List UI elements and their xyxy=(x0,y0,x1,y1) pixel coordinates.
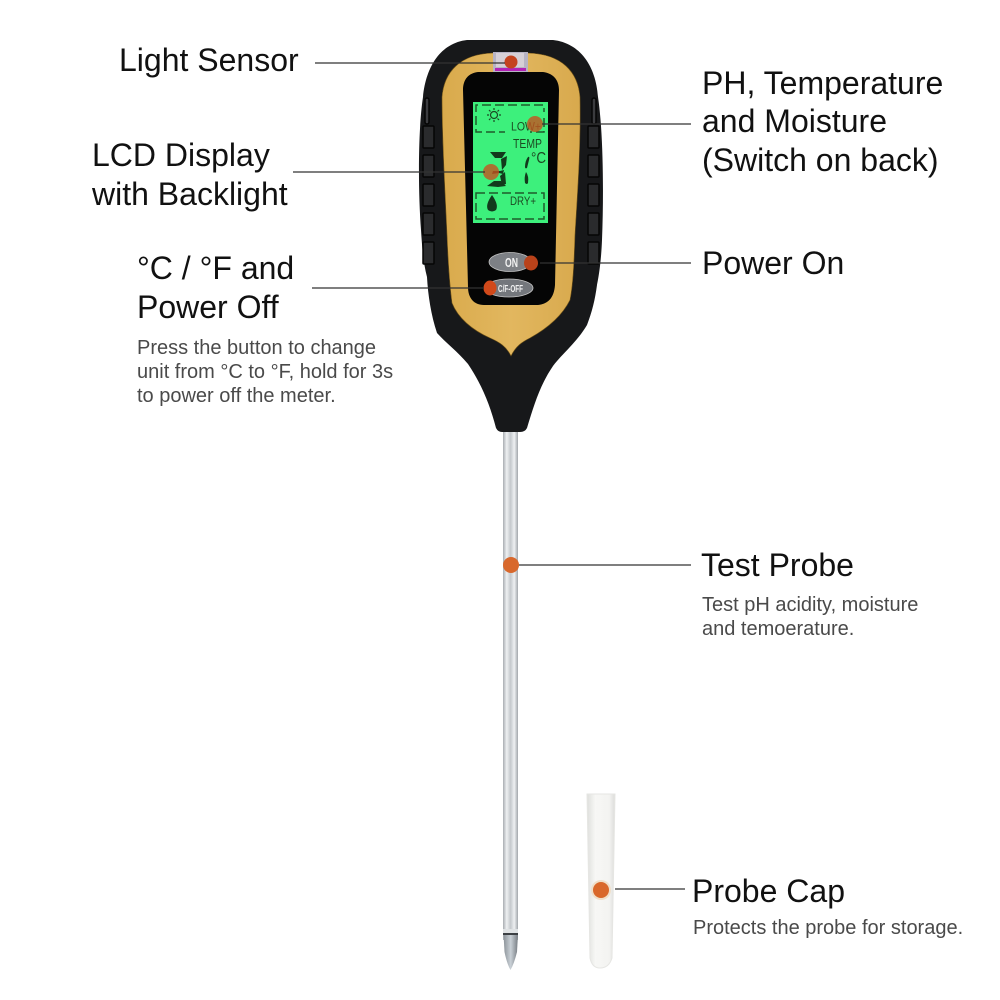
label: Test Probe: Test Probe xyxy=(701,547,854,583)
label: Power On: Power On xyxy=(702,245,844,281)
LCD screen: LOW+ xyxy=(511,120,541,134)
button: ON: ON xyxy=(505,255,518,270)
label: C/F and Power Off: Power Off xyxy=(137,289,279,325)
label: C/F and Power Off: °C / °F and xyxy=(137,250,294,286)
label: PH, Temperature and Moisture: and Moisture xyxy=(702,103,887,139)
meter body xyxy=(419,40,603,432)
gold faceplate xyxy=(442,53,580,356)
note: C/F button: unit from °C to °F, hold for 3s xyxy=(137,361,393,383)
label: Light Sensor: Light Sensor xyxy=(119,42,299,78)
seven-segment reading xyxy=(487,152,529,187)
label: LCD Display with Backlight: LCD Display xyxy=(92,137,270,173)
label: PH, Temperature and Moisture: (Switch on back) xyxy=(702,142,939,178)
LCD screen: DRY+ xyxy=(510,194,536,208)
marker dots on meter xyxy=(483,116,543,180)
LCD screen: TEMP xyxy=(513,136,542,151)
black display panel xyxy=(463,72,559,305)
label: PH, Temperature and Moisture: PH, Temperature xyxy=(702,65,943,101)
icon: sun xyxy=(487,108,501,122)
LCD screen: °C xyxy=(531,150,546,167)
black housing xyxy=(419,40,603,432)
label: Probe Cap: Probe Cap xyxy=(692,873,845,909)
note: Test Probe: and temoerature. xyxy=(702,618,854,640)
label: LCD Display with Backlight: with Backlight xyxy=(91,176,288,212)
leader lines xyxy=(293,63,691,889)
probe cap xyxy=(587,794,615,968)
note: C/F button: to power off the meter. xyxy=(137,385,336,407)
light sensor window xyxy=(493,52,528,72)
icon: water drop xyxy=(487,195,497,212)
probe marker xyxy=(503,557,519,573)
side grip slots xyxy=(423,98,599,264)
button: C/F-OFF: C/F-OFF xyxy=(498,284,523,295)
button: ON xyxy=(489,252,538,272)
test probe rod xyxy=(503,430,518,970)
LCD screen xyxy=(473,102,548,223)
note: Probe Cap: Protects the probe for storage. xyxy=(693,917,963,939)
button: C/F-OFF xyxy=(484,279,533,297)
note: Test Probe: Test pH acidity, moisture xyxy=(702,594,918,616)
note: C/F button: Press the button to change xyxy=(137,337,376,359)
